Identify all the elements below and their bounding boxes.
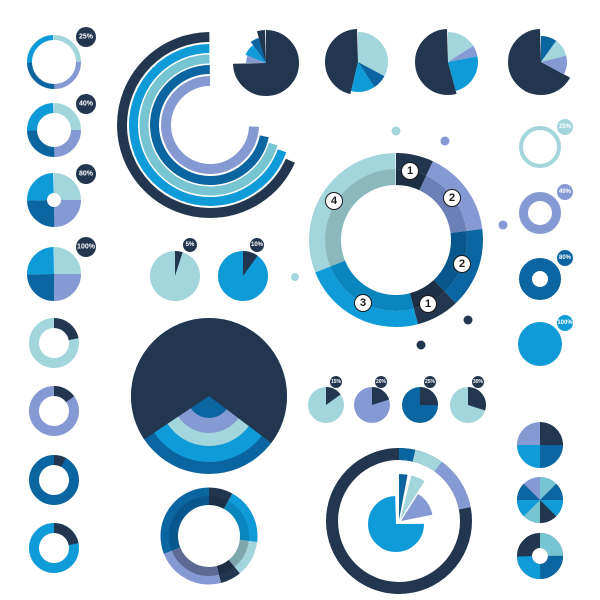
inner exploded pie	[376, 497, 423, 543]
numbered donut chart	[317, 161, 475, 319]
right column: 100% circle	[518, 315, 573, 366]
right bottom pie: eighths	[517, 477, 563, 523]
top pie 3	[432, 46, 464, 78]
right column: 40% ring: 40%	[559, 189, 572, 195]
right column: 80% ring	[526, 250, 573, 294]
small pies row: 20%: 20%	[376, 379, 387, 385]
left column: light donut	[34, 323, 74, 363]
left column: 100% pie	[40, 237, 96, 288]
top pie 2	[342, 46, 374, 78]
small pies row: 30%: 30%	[473, 379, 484, 385]
right bottom donut: quarters	[524, 540, 556, 572]
right column: 80% ring: 80%	[559, 255, 572, 261]
right bottom pie: quarters	[517, 422, 563, 468]
10% pie	[218, 238, 268, 301]
small pies row: 30%	[450, 376, 486, 423]
numbered labels: 1	[425, 298, 431, 310]
left column: blue donut	[34, 528, 74, 568]
small pies row: 20%	[354, 376, 390, 423]
right column: 40% ring	[524, 184, 573, 230]
numbered labels: 2	[459, 258, 465, 270]
left column: 40% donut	[32, 94, 96, 152]
big concentric C arcs	[122, 37, 298, 213]
left column: 80% donut	[37, 164, 96, 217]
decorative dots	[291, 126, 508, 350]
left column: 100% pie: 100%	[77, 244, 96, 250]
numbered labels: 1	[407, 165, 413, 177]
big cut pie with concentric arcs	[131, 318, 287, 474]
left column: 25% donut	[30, 27, 96, 86]
bottom segmented donut	[165, 492, 253, 580]
numbered labels: 2	[449, 192, 455, 204]
left column: 40% donut: 40%	[79, 100, 94, 108]
small pies row: 25%: 25%	[425, 379, 436, 385]
right column: 25% ring	[521, 119, 573, 166]
left column: periwinkle donut	[34, 391, 74, 431]
big ring with exploded pie	[332, 454, 466, 588]
left column: 25% donut: 25%	[79, 34, 94, 40]
5% pie: 5%	[186, 242, 195, 248]
small pies row: 15%: 15%	[331, 379, 342, 385]
top pie 1	[250, 46, 282, 80]
small pies row: 15%	[308, 376, 344, 423]
left column: 80% donut: 80%	[79, 170, 94, 178]
numbered labels: 4	[331, 195, 338, 207]
numbered labels: 3	[360, 297, 366, 309]
5% pie	[150, 238, 200, 301]
small pies row: 25%	[402, 376, 438, 423]
right column: 100% circle: 100%	[557, 320, 573, 326]
right column: 25% ring: 25%	[559, 124, 572, 130]
top pie 4	[524, 46, 558, 78]
numbered labels	[326, 162, 470, 312]
10% pie: 10%	[251, 242, 264, 248]
left column: dark blue donut	[34, 460, 74, 500]
